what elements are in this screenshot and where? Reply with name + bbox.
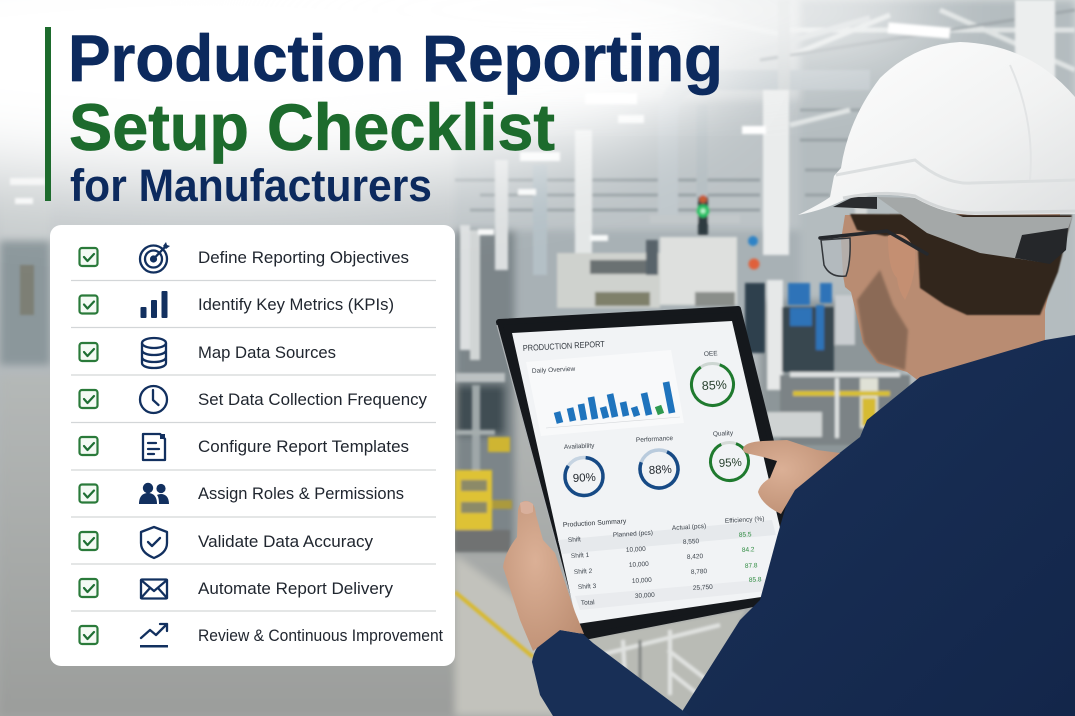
production summary table: 84.2 — [742, 546, 755, 554]
glasses — [820, 231, 927, 276]
row: review and continuous improvement: Review & Continuous Improvement — [198, 626, 443, 645]
availability gauge: 90% — [573, 472, 596, 485]
production summary table: Efficiency (%) — [725, 516, 765, 525]
production summary table: 30,000 — [635, 592, 655, 600]
production summary table: Shift 2 — [574, 568, 593, 576]
production summary table: 25,750 — [693, 584, 713, 592]
production summary table: Planned (pcs) — [613, 530, 653, 539]
soft white wash — [0, 0, 730, 185]
production summary table — [558, 516, 780, 610]
pipes and columns — [668, 80, 870, 220]
neck and face — [841, 213, 1060, 382]
title line 2: Setup Checklist — [69, 90, 555, 164]
production summary table: Total — [581, 599, 595, 607]
tablet — [497, 309, 808, 637]
production summary table: 8,550 — [683, 538, 700, 546]
availability gauge — [563, 442, 605, 497]
row: automate report delivery: Automate Report Delivery — [198, 579, 393, 598]
daily overview bar chart: Daily Overview — [532, 366, 576, 375]
production summary table: Shift — [568, 536, 581, 544]
row: assign roles and permissions — [80, 483, 404, 504]
production summary table: 85.5 — [739, 531, 752, 539]
ear — [888, 234, 915, 300]
upper ceiling haze — [180, 0, 940, 80]
right hand pointing — [743, 440, 840, 514]
OEE gauge: 85% — [701, 378, 727, 393]
title line 3: for Manufacturers — [70, 160, 432, 211]
row: map data sources: Map Data Sources — [198, 343, 336, 362]
row: configure report templates: Configure Report Templates — [198, 437, 409, 456]
row: validate data accuracy — [80, 527, 374, 558]
thumb nail — [520, 501, 533, 514]
left sleeve — [532, 630, 690, 716]
production summary table: 87.8 — [745, 562, 758, 570]
production summary table: 10,000 — [629, 561, 649, 569]
row: automate report delivery — [80, 579, 393, 598]
production summary table: Shift 3 — [578, 583, 597, 591]
row: map data sources — [80, 338, 336, 368]
performance gauge — [634, 435, 684, 494]
production summary table: Actual (pcs) — [672, 523, 706, 532]
row: assign roles and permissions: Assign Roles & Permissions — [198, 484, 404, 503]
left hand holding tablet — [503, 501, 584, 651]
quality gauge: Quality — [713, 430, 734, 438]
row: identify key metrics: Identify Key Metrics (KPIs) — [198, 295, 394, 314]
hair — [850, 214, 1072, 315]
cabinets — [557, 253, 660, 308]
production summary table: Production Summary — [563, 518, 627, 529]
lower right frames — [780, 375, 910, 445]
worker — [503, 42, 1075, 716]
production summary table: 8,420 — [687, 553, 704, 561]
OEE gauge: OEE — [704, 350, 718, 358]
availability gauge: Availability — [564, 442, 595, 451]
quality gauge — [705, 430, 754, 486]
row: configure report templates — [80, 434, 409, 460]
jacket body — [683, 335, 1075, 716]
production summary table: 8,780 — [691, 568, 708, 576]
stubble — [857, 270, 908, 370]
row: identify key metrics — [80, 291, 394, 318]
production summary table: Shift 1 — [571, 552, 590, 560]
title accent bar — [45, 27, 51, 201]
performance gauge: Performance — [636, 435, 674, 444]
production summary table: 10,000 — [632, 577, 652, 585]
panel: checklist — [50, 225, 455, 666]
row: define reporting objectives — [80, 242, 409, 272]
helmet suspension strap — [877, 197, 1072, 262]
production summary table: 10,000 — [626, 546, 646, 554]
ceiling lights — [888, 22, 950, 39]
production summary table: 85.8 — [749, 576, 762, 584]
row: define reporting objectives: Define Reporting Objectives — [198, 248, 409, 267]
status lights and boxes — [698, 197, 708, 235]
helmet — [798, 42, 1075, 215]
row: review and continuous improvement — [80, 624, 443, 648]
floor line and under-tablet frames — [455, 592, 533, 657]
row: set data collection frequency: Set Data Collection Frequency — [198, 390, 427, 409]
title — [45, 21, 723, 211]
quality gauge: 95% — [719, 457, 742, 470]
performance gauge: 88% — [649, 464, 672, 477]
title line 1: Production Reporting — [68, 21, 723, 95]
OEE gauge — [686, 350, 739, 411]
report heading: PRODUCTION REPORT — [523, 339, 605, 353]
trusses — [455, 110, 900, 210]
row: validate data accuracy: Validate Data Accuracy — [198, 532, 374, 551]
left machinery — [470, 230, 480, 360]
row: set data collection frequency — [80, 386, 427, 413]
daily overview bar chart — [526, 350, 684, 436]
